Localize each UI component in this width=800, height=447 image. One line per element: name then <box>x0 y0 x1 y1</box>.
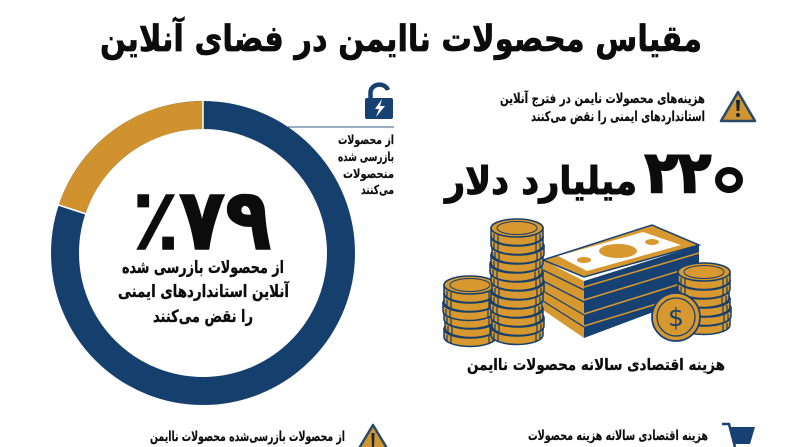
donut description: از محصولات بازرسی شده <box>122 258 284 278</box>
big statistic: 220 billion dollars: ۲۲۰ <box>645 140 744 206</box>
callout: lock text: می‌کنند <box>361 182 394 197</box>
left coin stack <box>443 276 497 346</box>
big statistic: 79 percent: ٪۷۹ <box>132 171 272 270</box>
right coin stack <box>677 263 731 334</box>
callout: bottom left text: از محصولات بازرسی‌شده محصولات ناایمن <box>150 429 345 445</box>
money caption: هزینه اقتصادی سالانه محصولات ناایمن <box>467 355 725 374</box>
dollar coin: $ <box>668 303 684 332</box>
callout: lock text <box>338 132 394 197</box>
big statistic: 220 billion dollars: میلیارد دلار <box>443 159 637 203</box>
big statistic: 220 billion dollars <box>443 140 744 206</box>
callout: lock text: از محصولات <box>338 132 394 147</box>
donut chart: 79 percent <box>57 100 341 391</box>
dollar coin <box>652 293 700 341</box>
icon: shopping cart <box>722 424 755 447</box>
bill stack <box>543 225 699 338</box>
illustration: money and coins <box>443 219 731 346</box>
middle coin stack <box>490 219 544 344</box>
callout: lock text: بازرسی شده <box>338 149 394 164</box>
icon: broken lock <box>365 85 393 119</box>
callout: cost text <box>500 90 705 125</box>
title: مقیاس محصولات ناایمن در فضای آنلاین <box>100 16 702 60</box>
callout: cost text: هزینه‌های محصولات نایمن در فترج آنلاین <box>500 90 705 107</box>
donut description <box>118 258 290 327</box>
callout: bottom right text: هزینه اقتصادی سالانه هزینه محصولات <box>528 428 708 444</box>
callout: lock text: منحصولات <box>343 166 394 181</box>
donut description: را نقض می‌کنند <box>153 307 253 327</box>
donut description: آنلاین استانداردهای ایمنی <box>118 280 290 302</box>
callout: cost text: استانداردهای ایمنی را نقض می‌کنند <box>531 109 705 125</box>
icon: warning bottom <box>358 425 388 447</box>
leader line <box>288 126 394 128</box>
icon: warning top <box>721 92 755 121</box>
